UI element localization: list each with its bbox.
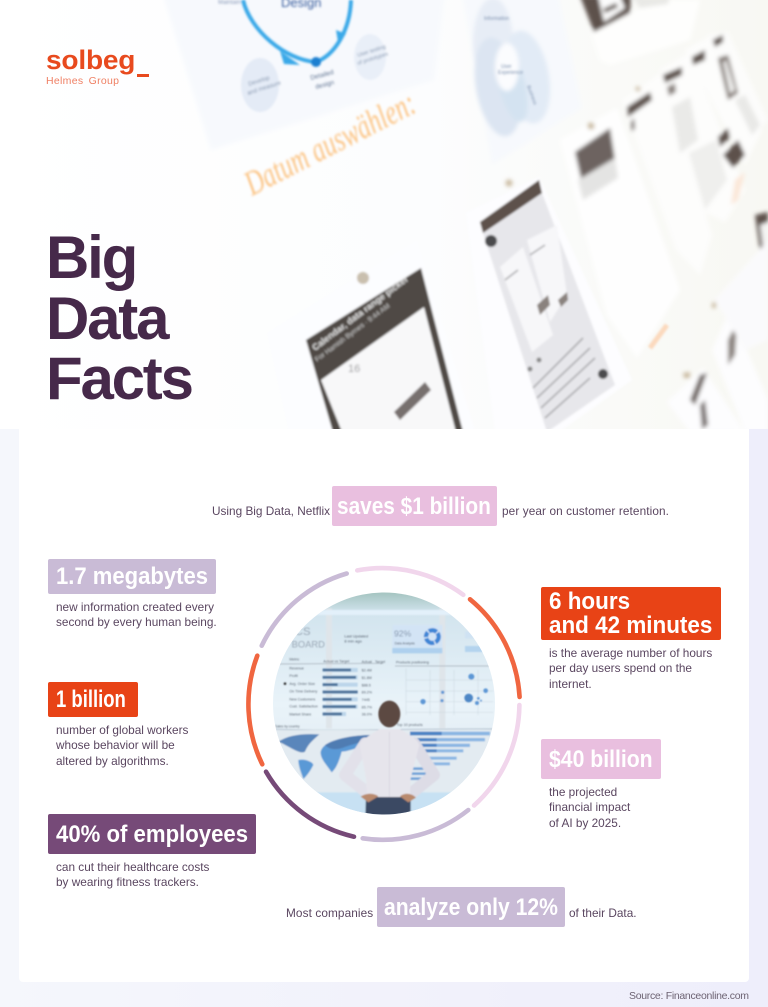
highlight: 40% of employees — [56, 821, 248, 848]
description: internet. — [549, 677, 592, 691]
venn labels: Experience — [498, 70, 523, 76]
photo: analyst before dashboard: 7445 — [362, 698, 370, 702]
title — [46, 224, 192, 412]
calendar card: For Hamish Byrnes · 9:44 AM — [314, 303, 392, 364]
highlight: 1.7 megabytes — [56, 563, 208, 590]
photo: analyst before dashboard: Last Updated — [344, 634, 368, 639]
logo subtitle: Helmes Group — [46, 74, 119, 86]
title: Data — [46, 284, 167, 352]
design cycle diagram: User testing — [357, 44, 387, 59]
photo: analyst before dashboard: BOARD — [292, 640, 325, 650]
ring segment: purple lower left — [266, 772, 354, 837]
fact: 40% of employees — [48, 814, 256, 889]
description — [549, 646, 712, 691]
photo: analyst before dashboard: 92% — [394, 629, 412, 639]
description: number of global workers — [56, 723, 188, 737]
photo: analyst before dashboard: Top 10 products — [397, 723, 423, 727]
highlight — [48, 682, 138, 717]
description: altered by algorithms. — [56, 754, 169, 768]
netflix highlight: saves $1 billion — [337, 493, 491, 520]
description: financial impact — [549, 800, 630, 814]
photo: analyst before dashboard: Cust. Satisfaction — [289, 705, 318, 709]
design cycle diagram: Detailed — [310, 69, 335, 82]
analyst figure — [345, 701, 434, 816]
logo wordmark: solbeg — [46, 45, 135, 75]
description: of AI by 2025. — [549, 816, 621, 830]
calendar card: 16 — [348, 363, 360, 375]
photo: analyst before dashboard: Sales by country — [275, 725, 300, 729]
photo: analyst before dashboard: 36.0% — [362, 713, 373, 717]
analyze highlight: analyze only 12% — [384, 894, 558, 921]
photo: analyst before dashboard: On Time Delivery — [289, 690, 318, 694]
design cycle diagram: and measure — [247, 80, 283, 97]
highlight — [48, 559, 216, 594]
description — [56, 600, 217, 629]
description: new information created every — [56, 600, 214, 614]
design cycle diagram: design — [315, 79, 335, 91]
photo: analyst before dashboard: Actual vs Target — [323, 659, 349, 663]
venn diagram sheet — [462, 0, 582, 165]
grey card with form panels — [466, 177, 667, 432]
design cycle diagram: of prototypes — [357, 51, 389, 67]
netflix fact — [212, 486, 669, 526]
top wireframes — [506, 0, 768, 358]
photo: analyst before dashboard: $88.5 — [362, 683, 371, 687]
ring segment: lilac upper left — [262, 574, 347, 646]
venn labels: Business — [525, 85, 538, 106]
description: is the average number of hours — [549, 646, 712, 660]
description: the projected — [549, 785, 617, 799]
ring segment: pink right — [474, 705, 519, 806]
highlight: $40 billion — [549, 746, 653, 773]
photo: analyst before dashboard: $1.8M — [362, 676, 372, 680]
ring segment: lilac bottom — [363, 810, 468, 840]
venn labels: User — [501, 64, 512, 70]
ring segment: orange right — [470, 599, 520, 697]
photo: analyst before dashboard: Profit — [289, 674, 298, 678]
photo: analyst before dashboard: Metric — [289, 658, 299, 662]
netflix lead text: Using Big Data, Netflix — [212, 504, 330, 518]
logo underscore — [137, 74, 149, 76]
title: Big — [46, 224, 136, 291]
source: Source: Financeonline.com — [629, 990, 749, 1002]
handwriting: Datum auswählen: — [237, 83, 422, 203]
design cycle diagram — [218, 0, 389, 112]
photo: analyst before dashboard: Data Analysis — [395, 641, 415, 645]
segmented ring — [248, 568, 520, 840]
highlight — [48, 814, 256, 854]
fact: 6 hours and 42 minutes — [541, 587, 721, 691]
photo: analyst before dashboard: Market Share — [289, 712, 311, 716]
photo: analyst before dashboard: New Customers — [289, 697, 316, 701]
description — [549, 785, 630, 830]
analyze fact — [286, 887, 637, 927]
ring segment: orange left — [248, 656, 262, 764]
description: per day users spend on the — [549, 661, 692, 675]
calendar card: Calendar, data range picker — [310, 274, 410, 353]
description: by wearing fitness trackers. — [56, 875, 199, 889]
title: Facts — [46, 345, 192, 412]
photo: analyst before dashboard: 8 min ago — [344, 638, 363, 643]
netflix highlight — [332, 486, 497, 526]
white content panel — [19, 429, 749, 982]
analyze highlight — [377, 887, 565, 927]
fact: 1 billion — [48, 682, 188, 768]
photo: analyst before dashboard: 89.2% — [362, 691, 373, 695]
design cycle diagram sheet — [162, 0, 445, 150]
description: can cut their healthcare costs — [56, 860, 209, 874]
venn labels — [484, 16, 538, 106]
highlight — [541, 587, 721, 640]
highlight: 1 billion — [56, 686, 126, 713]
central photo with ring — [246, 566, 522, 842]
description: whose behavior will be — [56, 738, 175, 752]
design cycle diagram: Develop — [248, 75, 271, 88]
photo: analyst before dashboard: 85.7% — [362, 705, 373, 709]
logo — [46, 45, 149, 86]
analyze trailing text: of their Data. — [569, 906, 637, 920]
photo: analyst before dashboard: Target — [375, 660, 385, 664]
photo: analyst before dashboard: Products positioning — [396, 661, 429, 665]
highlight: 6 hours — [549, 588, 630, 615]
photo: analyst before dashboard: Actual — [362, 660, 372, 664]
photo: analyst before dashboard: $2.4M — [362, 668, 372, 672]
netflix trailing text: per year on customer retention. — [502, 504, 669, 518]
design cycle diagram: Maintain — [218, 0, 241, 6]
highlight: and 42 minutes — [549, 612, 712, 639]
highlight — [541, 739, 661, 779]
photo: analyst before dashboard: Avg. Order Size — [289, 682, 315, 686]
calendar card — [267, 240, 475, 432]
description — [56, 723, 188, 768]
photo: analyst before dashboard: Revenue — [289, 667, 304, 671]
fact: 1.7 megabytes — [48, 559, 217, 629]
description — [56, 860, 209, 889]
lower right cards — [667, 212, 768, 432]
analyze lead text: Most companies — [286, 906, 373, 920]
ring segment: pink top — [357, 568, 463, 595]
photo: analyst before dashboard: ICS — [292, 626, 311, 638]
hero photo: wall of paper wireframes — [0, 0, 768, 429]
description: second by every human being. — [56, 615, 217, 629]
venn labels: Information — [484, 16, 509, 22]
fact: $40 billion — [541, 739, 661, 830]
photo: analyst before dashboard — [270, 590, 500, 818]
